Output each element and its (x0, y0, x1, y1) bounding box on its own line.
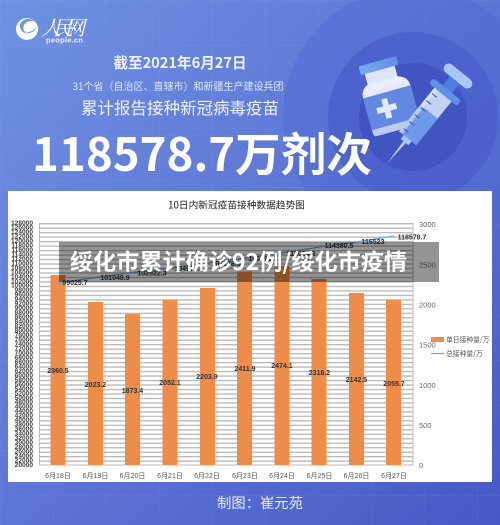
left axis labels: 60000 (15, 372, 33, 379)
left axis labels: 84000 (15, 319, 33, 326)
left axis labels: 82000 (15, 323, 33, 330)
x axis labels: 6月24日 (269, 472, 295, 480)
right axis labels (419, 220, 436, 470)
x axis labels: 6月18日 (45, 472, 71, 480)
x axis labels: 6月20日 (120, 472, 145, 480)
line value labels: 118578.7 (398, 234, 427, 242)
left axis labels: 124000 (11, 229, 33, 236)
left axis labels: 114000 (11, 251, 33, 258)
left axis labels: 106000 (11, 269, 33, 276)
left axis labels: 92000 (15, 301, 33, 308)
credit: 制图：崔元苑 (217, 492, 303, 513)
x axis labels: 6月25日 (307, 472, 332, 480)
bar value labels: 2052.1 (159, 380, 181, 387)
left axis labels: 36000 (15, 426, 33, 433)
panel: chart (8, 191, 492, 482)
left axis labels (11, 220, 33, 469)
left axis labels: 20000 (15, 462, 33, 469)
bar value labels: 2142.5 (346, 377, 367, 384)
left axis labels: 50000 (15, 395, 33, 402)
overlay banner: 绥化市累计确诊92例/绥化市疫情 (70, 245, 407, 277)
left axis labels: 128000 (11, 220, 33, 227)
left axis labels: 64000 (15, 363, 33, 370)
right axis labels: 3000 (419, 220, 436, 229)
line value labels: 101048.9 (100, 275, 130, 282)
x axis labels: 6月27日 (381, 472, 407, 480)
left axis labels: 58000 (15, 377, 33, 384)
right axis labels: 2000 (419, 300, 436, 310)
legend: 单日接种量/万 (446, 334, 490, 344)
line value labels: 109590.2 (248, 256, 278, 263)
left axis labels: 126000 (11, 224, 33, 232)
icon: vaccine bottle (355, 54, 421, 137)
bar value labels: 2203.9 (196, 374, 218, 381)
x axis labels: 6月19日 (83, 472, 108, 480)
left axis labels: 40000 (15, 417, 33, 424)
logo: people.cn (16, 12, 88, 44)
heading: cumulative: 累计报告接种新冠病毒疫苗 (81, 95, 279, 119)
left axis labels: 94000 (15, 296, 33, 303)
x axis labels: 6月23日 (232, 472, 258, 480)
x axis labels: 6月22日 (194, 472, 220, 480)
left axis labels: 98000 (15, 287, 33, 294)
x axis labels (45, 472, 407, 480)
bar value labels: 2360.5 (47, 368, 69, 375)
bars: daily doses (50, 266, 401, 465)
left axis labels: 70000 (15, 350, 33, 357)
left axis labels: 66000 (15, 359, 33, 366)
left axis labels: 28000 (15, 444, 33, 451)
big number: 118578.7万剂次 (32, 119, 372, 185)
heading: regions: 31个省（自治区、直辖市）和新疆生产建设兵团 (72, 78, 284, 93)
line value labels: 114380.5 (325, 243, 354, 250)
line value labels: 116523 (362, 239, 385, 246)
bar value labels: 2316.2 (309, 370, 330, 377)
left axis labels: 112000 (11, 256, 33, 263)
heading: date: 截至2021年6月27日 (113, 52, 247, 73)
left axis labels: 100000 (11, 283, 33, 290)
bar value labels: 2411.9 (234, 366, 256, 373)
chart title: 10日内新冠疫苗接种数据趋势图 (168, 198, 305, 212)
line value labels: 104974.4 (174, 266, 204, 273)
left axis labels: 80000 (15, 328, 33, 334)
right axis labels: 2500 (419, 260, 436, 270)
left axis labels: 48000 (15, 399, 33, 406)
left axis labels: 62000 (15, 368, 33, 375)
left axis labels: 122000 (11, 233, 33, 240)
left axis labels: 32000 (15, 435, 33, 442)
left axis labels: 46000 (15, 404, 33, 411)
left axis labels: 42000 (15, 413, 33, 420)
line value labels: 99025.7 (62, 280, 88, 287)
left axis labels: 96000 (15, 292, 33, 299)
line value labels (62, 234, 427, 287)
right axis labels: 500 (419, 421, 432, 430)
bar value labels: 2023.2 (85, 382, 106, 389)
left axis labels: 110000 (11, 260, 33, 267)
left axis labels: 86000 (15, 314, 33, 321)
left axis labels: 120000 (11, 238, 33, 245)
icon: syringe (373, 61, 475, 175)
logo: people.cn: 人民网 (41, 12, 88, 41)
left axis labels: 54000 (15, 386, 33, 393)
left axis labels: 88000 (15, 310, 33, 317)
left axis labels: 118000 (11, 242, 33, 249)
right axis labels: 1500 (419, 340, 436, 350)
x axis labels: 6月26日 (344, 472, 369, 480)
left axis labels: 26000 (15, 448, 33, 456)
left axis labels: 56000 (15, 381, 33, 388)
left axis labels: 52000 (15, 390, 33, 397)
bar value labels: 2474.1 (271, 363, 293, 370)
left axis labels: 22000 (15, 458, 33, 464)
bar value labels: 2055.7 (383, 381, 405, 388)
line value labels: 107178.3 (211, 261, 241, 268)
plot grid (40, 223, 413, 465)
left axis labels: 76000 (15, 336, 33, 344)
left axis labels: 104000 (11, 274, 33, 281)
overlay banner (59, 242, 439, 282)
left axis labels: 90000 (15, 305, 33, 312)
left axis labels: 24000 (15, 453, 33, 460)
left axis labels: 30000 (15, 440, 33, 447)
left axis labels: 116000 (11, 247, 33, 254)
left axis labels: 34000 (15, 431, 33, 438)
left axis labels: 108000 (11, 265, 33, 272)
right axis labels: 1000 (419, 381, 436, 390)
left axis labels: 78000 (15, 332, 33, 339)
right axis labels: 0 (419, 461, 423, 470)
line: total doses (58, 236, 394, 283)
left axis labels: 72000 (15, 346, 33, 352)
left axis labels: 38000 (15, 422, 33, 429)
bar value labels: 1873.4 (122, 388, 143, 395)
left axis labels: 68000 (15, 354, 33, 361)
x axis labels: 6月21日 (157, 472, 183, 480)
line value labels: 102922.3 (137, 270, 167, 278)
left axis labels: 74000 (15, 341, 33, 348)
legend: 总接种量/万 (446, 348, 483, 358)
bar value labels (47, 363, 405, 395)
left axis labels: 102000 (11, 278, 33, 285)
logo: people.cn: people.cn (46, 36, 83, 44)
left axis labels: 44000 (15, 408, 33, 415)
line value labels: 112064.3 (287, 251, 316, 258)
legend (431, 334, 490, 358)
